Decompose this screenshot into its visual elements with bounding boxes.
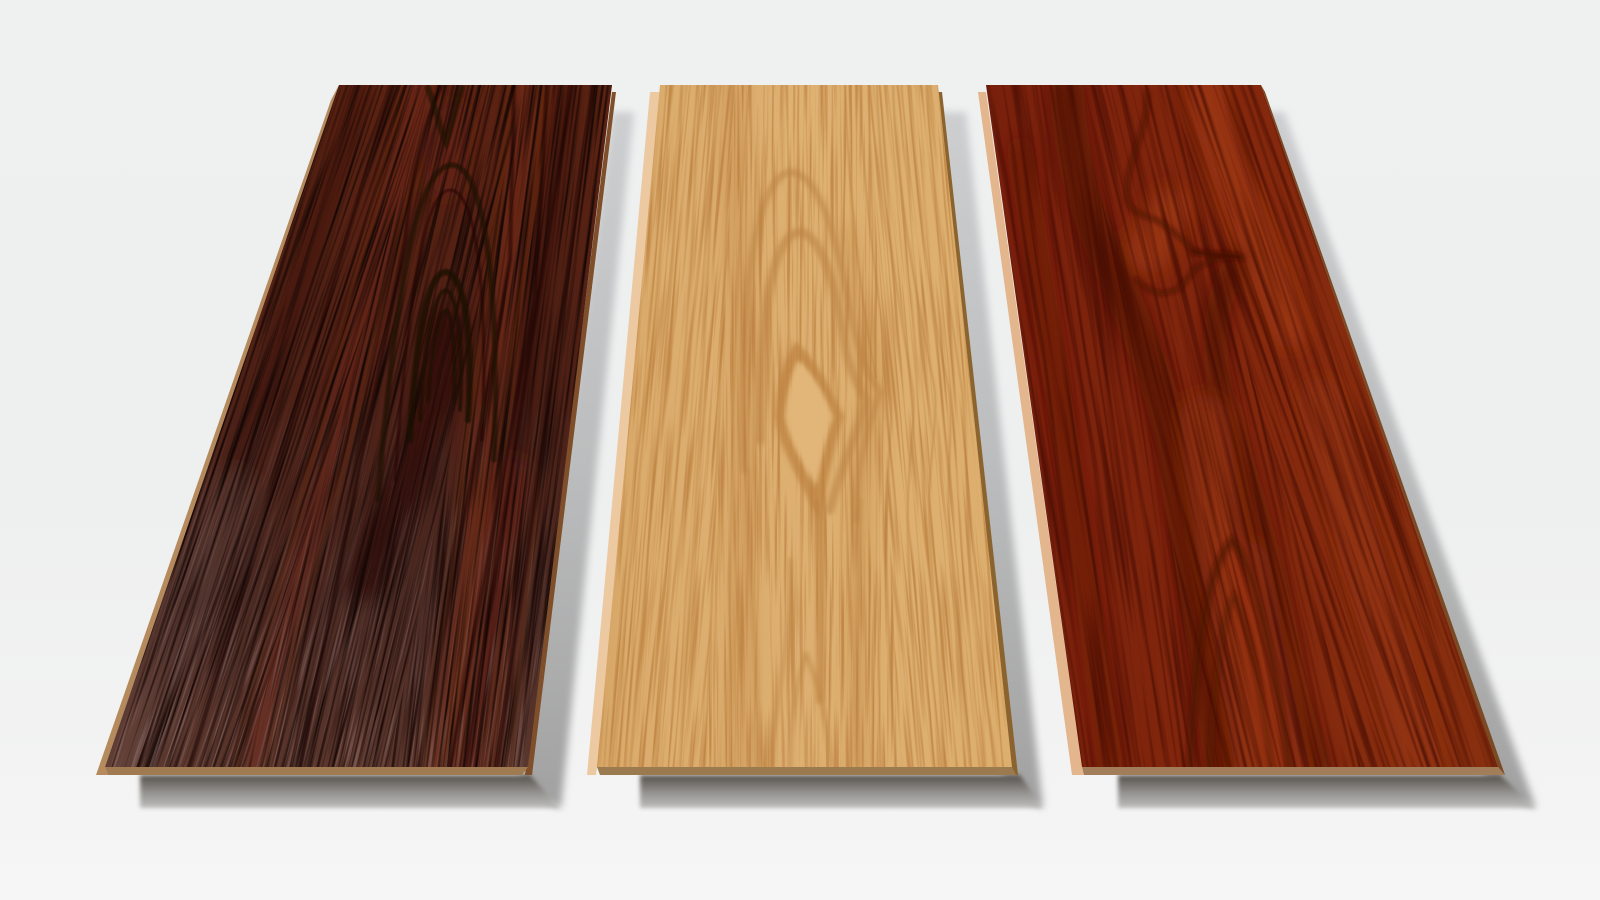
dark plank fine grain noise bbox=[92, 85, 625, 775]
plank: dark walnut bbox=[92, 85, 625, 775]
red plank tongue and groove edges bbox=[978, 85, 1505, 775]
dark plank tongue and groove edges bbox=[96, 85, 616, 775]
light plank end face bbox=[597, 767, 1016, 775]
light plank tongue and groove edges bbox=[587, 92, 1018, 775]
light plank grain lines bbox=[612, 85, 995, 767]
red plank end face bbox=[1082, 767, 1505, 775]
shadows under planks bbox=[140, 112, 1536, 808]
red plank fine grain noise bbox=[970, 85, 1510, 775]
red plank face bbox=[970, 85, 1510, 775]
light plank knot bbox=[786, 362, 832, 484]
light plank fine grain noise bbox=[581, 85, 1022, 775]
plank: light oak bbox=[581, 85, 1022, 775]
red plank figure lines bbox=[1127, 92, 1290, 767]
light plank cathedral arches bbox=[743, 172, 880, 767]
dark plank grain lines bbox=[190, 85, 594, 767]
plank: red mahogany bbox=[970, 85, 1510, 775]
dark plank face bbox=[92, 85, 625, 775]
light plank face bbox=[581, 85, 1022, 775]
dark plank end face bbox=[105, 767, 528, 775]
